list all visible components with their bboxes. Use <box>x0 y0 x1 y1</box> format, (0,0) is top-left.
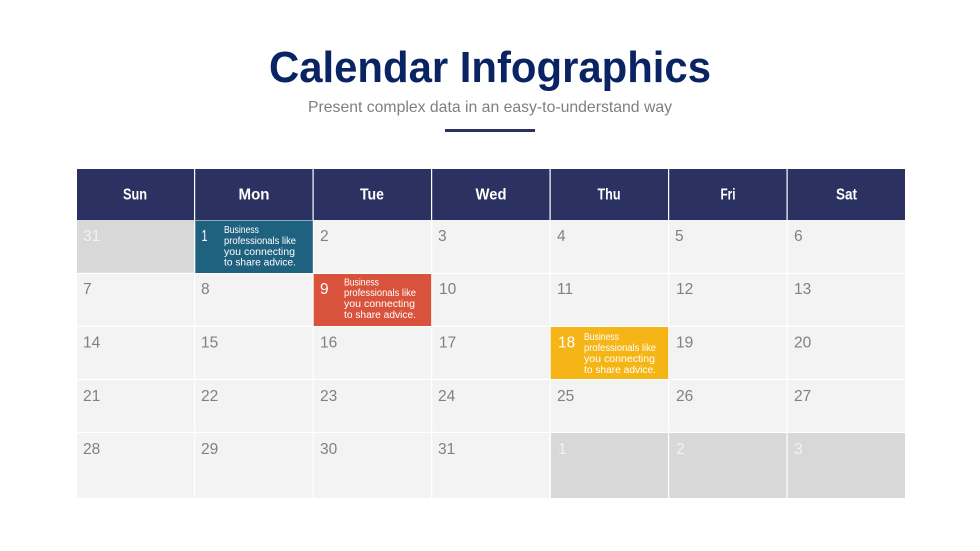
event: day 1: 1 <box>202 228 208 245</box>
event: day 9: 9 <box>320 281 329 298</box>
day numbers: 17 <box>439 334 456 352</box>
day numbers <box>83 228 812 458</box>
event: day 18: to share advice. <box>584 365 656 376</box>
day numbers: 23 <box>320 388 337 405</box>
day numbers: 7 <box>83 281 92 298</box>
day numbers: 19 <box>676 334 693 352</box>
event: day 1 <box>195 220 313 273</box>
event: day 18: you connecting <box>584 354 655 365</box>
day numbers: 26 <box>676 388 693 405</box>
day numbers: 20 <box>794 334 812 352</box>
header row: Mon <box>238 186 270 204</box>
calendar background cells <box>77 220 905 498</box>
event: day 9: Business <box>344 278 379 288</box>
header row: Sun <box>123 186 147 204</box>
day numbers: 29 <box>201 441 218 458</box>
event: day 9: professionals like <box>344 288 417 299</box>
day numbers: 21 <box>83 388 100 405</box>
header row: Sat <box>836 186 857 204</box>
day numbers: 16 <box>320 334 337 352</box>
event: day 1: professionals like <box>224 236 297 247</box>
subtitle: Present complex data in an easy-to-understand way <box>308 99 672 116</box>
day numbers: 6 <box>794 228 803 245</box>
day numbers: 22 <box>201 388 218 405</box>
day numbers: 31 <box>83 228 100 245</box>
day numbers: 10 <box>439 281 457 298</box>
day numbers: 27 <box>794 388 811 405</box>
event: day 9 <box>314 274 431 326</box>
event: day 1: to share advice. <box>224 258 296 268</box>
day numbers: 4 <box>557 228 566 245</box>
day numbers: 2 <box>320 228 329 245</box>
event: day 1: you connecting <box>224 247 295 258</box>
day numbers: 25 <box>557 388 574 405</box>
calendar <box>77 169 905 498</box>
header row: Thu <box>598 186 620 204</box>
day numbers: 1 <box>558 441 567 458</box>
event: day 9: to share advice. <box>344 310 416 321</box>
header row: Wed <box>476 186 506 204</box>
day numbers: 12 <box>676 281 693 298</box>
day numbers: 14 <box>83 334 101 352</box>
day numbers: 3 <box>438 228 447 245</box>
header row <box>77 169 905 220</box>
event: day 9: you connecting <box>344 299 415 310</box>
day numbers: 31 <box>438 441 455 458</box>
day numbers: 11 <box>557 281 573 298</box>
day numbers: 13 <box>794 281 811 298</box>
day numbers: 8 <box>201 281 210 298</box>
day numbers: 2 <box>676 441 685 458</box>
day numbers: 24 <box>438 388 456 405</box>
title divider <box>445 129 535 132</box>
event: day 1: Business <box>224 225 259 236</box>
title: Calendar Infographics <box>269 43 711 92</box>
day numbers: 28 <box>83 441 100 458</box>
day numbers: 5 <box>675 228 684 245</box>
event: day 18 <box>551 327 668 379</box>
event: day 18: professionals like <box>584 343 657 354</box>
event: day 18: Business <box>584 332 619 343</box>
header row: Fri <box>720 186 736 204</box>
day numbers: 30 <box>320 441 338 458</box>
day numbers: 15 <box>201 334 218 352</box>
header row: Tue <box>360 186 384 204</box>
event: day 18: 18 <box>558 334 575 352</box>
day numbers: 3 <box>794 441 803 458</box>
